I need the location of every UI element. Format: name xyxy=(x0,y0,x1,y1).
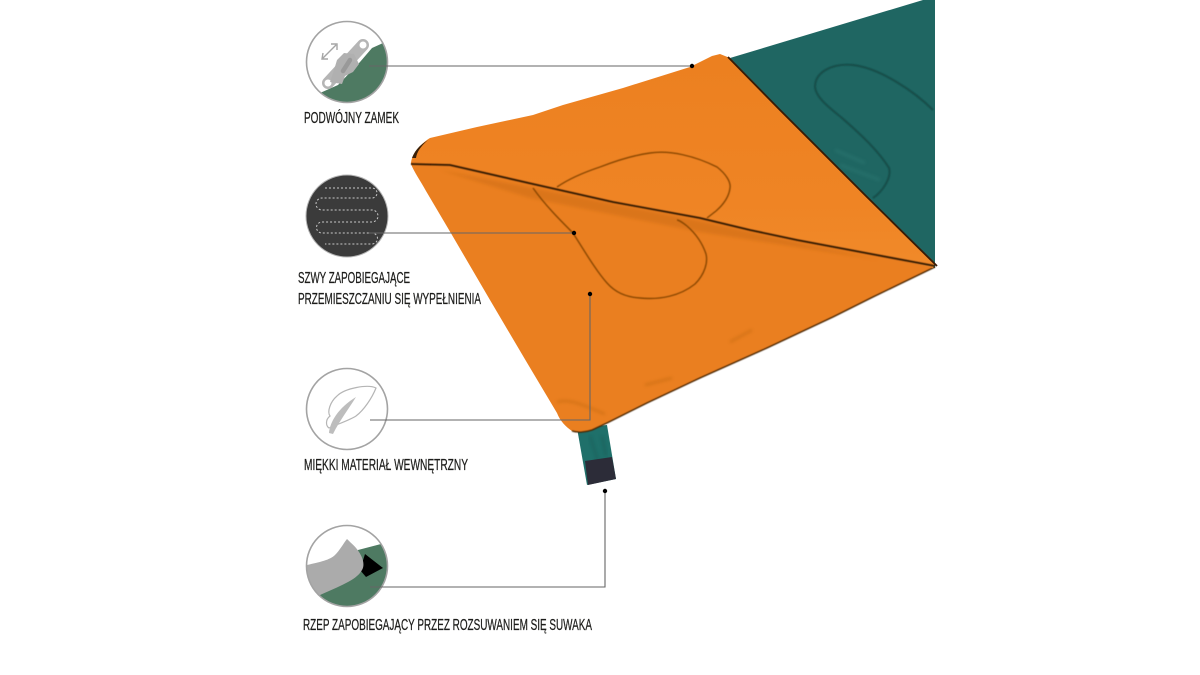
leader dot xyxy=(588,292,592,296)
teal outer shell xyxy=(730,0,935,268)
leader line xyxy=(369,232,574,234)
velcro patch xyxy=(585,457,616,485)
icon: feather circle xyxy=(306,368,388,450)
corner shadow xyxy=(412,140,428,158)
icon: stitching circle xyxy=(306,175,388,257)
bottom corner wrinkles xyxy=(557,330,752,414)
feature: soft inner material xyxy=(304,292,592,474)
leader line xyxy=(370,491,605,587)
label: SZWY ZAPOBIEGAJĄCE xyxy=(298,270,410,287)
label: RZEP ZAPOBIEGAJĄCY PRZEZ ROZSUWANIEM SIĘ SUWAKA xyxy=(303,617,592,634)
icon: zipper circle xyxy=(306,20,388,104)
orange lining, lower layer xyxy=(411,162,935,432)
orange lining top flap xyxy=(411,54,935,268)
label: MIĘKKI MATERIAŁ WEWNĘTRZNY xyxy=(304,457,468,474)
icon: double arrow xyxy=(322,44,337,59)
lower quilting seam xyxy=(533,188,707,298)
label: PODWÓJNY ZAMEK xyxy=(304,110,399,127)
zip edge xyxy=(728,57,937,266)
lower edge shadow xyxy=(572,267,935,432)
orange lining fold shadow xyxy=(440,170,880,260)
leader line xyxy=(370,294,590,420)
sleeping bag illustration xyxy=(411,0,937,485)
leader dot xyxy=(572,231,576,235)
upper quilting seam xyxy=(557,152,730,218)
feature: double zipper xyxy=(304,22,694,127)
feature: zipper velcro xyxy=(300,489,607,634)
leader line xyxy=(369,65,692,67)
leader dot xyxy=(690,64,694,68)
fold line xyxy=(411,164,935,266)
leader dot xyxy=(603,489,607,493)
label line two: PRZEMIESZCZANIU SIĘ WYPEŁNIENIA xyxy=(298,291,481,308)
strap with velcro xyxy=(577,425,616,485)
feature: anti-shift seams xyxy=(298,175,576,308)
icon: velcro circle xyxy=(306,524,388,608)
